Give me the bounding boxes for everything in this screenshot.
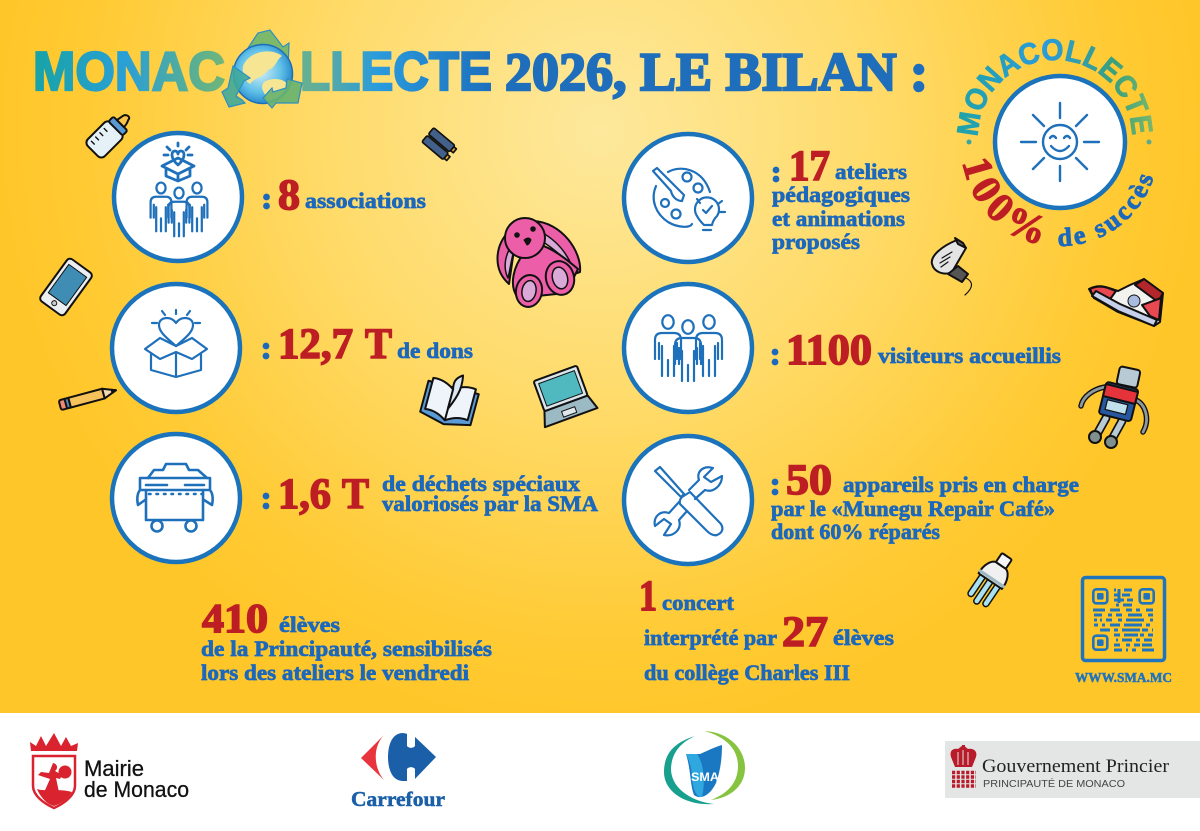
title: 2026, LE BILAN : — [505, 42, 928, 102]
icon: sneaker — [1089, 279, 1163, 326]
text: concert: élèves — [833, 625, 894, 650]
panel: visitors — [624, 284, 1061, 412]
stat text: 50 — [786, 457, 832, 504]
stat text — [263, 471, 599, 518]
icon: hair dryer — [932, 238, 972, 295]
QR code: WWW.SMA.MC — [1075, 670, 1172, 685]
title: MONAC — [33, 40, 225, 102]
title — [33, 40, 928, 102]
text: 410 pupils: élèves — [279, 612, 340, 637]
stat text: 8 — [278, 172, 300, 219]
stat text: de dons — [397, 338, 473, 363]
logo: Gouvernement Princier: PRINCIPAUTÉ DE MONACO — [983, 777, 1125, 790]
stat text: appareils pris en charge — [843, 472, 1079, 497]
stat text — [772, 143, 910, 254]
logo: Gouvernement Princier — [945, 741, 1200, 798]
stat text: 1,6 — [278, 471, 331, 518]
icon: wrench and screwdriver — [624, 436, 752, 564]
stat text — [771, 457, 1079, 544]
text: concert: 1 — [639, 573, 657, 620]
stat text: T — [342, 471, 369, 518]
icon: smartphone — [39, 257, 93, 317]
ring text: 100%: 100% — [962, 158, 1043, 244]
text: 410 pupils — [201, 595, 492, 685]
stat text: dont 60% réparés — [771, 519, 940, 544]
stat text: proposés — [772, 229, 860, 254]
footer band — [0, 713, 1200, 831]
stat text — [263, 172, 426, 219]
QR code — [1075, 578, 1172, 685]
text: concert — [639, 573, 894, 685]
panel: repair cafe — [624, 436, 1079, 564]
logo: Gouvernement Princier: Gouvernement Princier — [982, 756, 1170, 777]
text: concert: 27 — [782, 609, 828, 656]
stat text: 17 — [789, 143, 830, 190]
icon: laptop — [529, 364, 598, 427]
logo: Mairie de Monaco — [30, 733, 189, 808]
icon: people with gift box — [114, 133, 242, 261]
stat text: pédagogiques — [772, 182, 910, 207]
icon: group of people — [624, 284, 752, 412]
icon: recycling globe — [222, 30, 302, 108]
text: concert: concert — [662, 590, 735, 615]
icon: box with heart — [112, 284, 240, 412]
logo: Mairie de Monaco: Mairie — [84, 756, 144, 781]
logo: SMA: SMA — [691, 770, 719, 784]
icon: smiling sun — [995, 76, 1125, 208]
stat text: de déchets spéciaux — [382, 471, 581, 496]
stat text: valoriosés par la SMA — [382, 491, 599, 516]
stat text: associations — [305, 188, 426, 213]
panel: associations — [114, 133, 426, 261]
stat text: visiteurs accueillis — [878, 343, 1061, 368]
stat text: par le «Munegu Repair Café» — [771, 496, 1055, 521]
text: 410 pupils: lors des ateliers le vendredi — [201, 660, 469, 685]
logo: Carrefour: Carrefour — [351, 787, 445, 811]
ring text: Monacollecte: MONACOLLECTE — [956, 38, 1154, 136]
stat text: ateliers — [835, 159, 907, 184]
icon: pencil — [59, 385, 117, 410]
logo: SMA — [664, 731, 745, 804]
text: concert: interprété par — [644, 625, 777, 650]
stat text — [772, 327, 1061, 374]
text: 410 pupils: 410 — [202, 595, 268, 641]
text: concert: du collège Charles III — [644, 660, 850, 685]
badge: 100% success sun — [956, 38, 1154, 247]
stat text: et animations — [772, 206, 905, 231]
icon: energy-saving bulb — [965, 548, 1019, 609]
stat text: 1100 — [786, 327, 872, 374]
icon: open book — [419, 367, 482, 431]
stat text — [263, 321, 473, 368]
panel: donations — [112, 284, 473, 412]
logo: Carrefour — [351, 731, 445, 811]
icon: batteries — [422, 128, 458, 162]
stat text: T — [365, 321, 392, 368]
icon: baby bottle — [84, 107, 137, 160]
logo: Mairie de Monaco: de Monaco — [84, 777, 189, 802]
icon: waste container — [112, 434, 240, 562]
panel: workshops — [624, 134, 910, 262]
ring text: de succes: de succès — [1058, 174, 1153, 247]
icon: palette and bulb — [624, 134, 752, 262]
panel: special waste — [112, 434, 599, 562]
icon: robot — [1081, 366, 1147, 448]
icon: pink plush rabbit — [497, 218, 580, 309]
title: LLECTE — [300, 40, 492, 102]
text: 410 pupils: de la Principauté, sensibilisés — [201, 636, 492, 661]
stat text: 12,7 — [278, 321, 353, 368]
